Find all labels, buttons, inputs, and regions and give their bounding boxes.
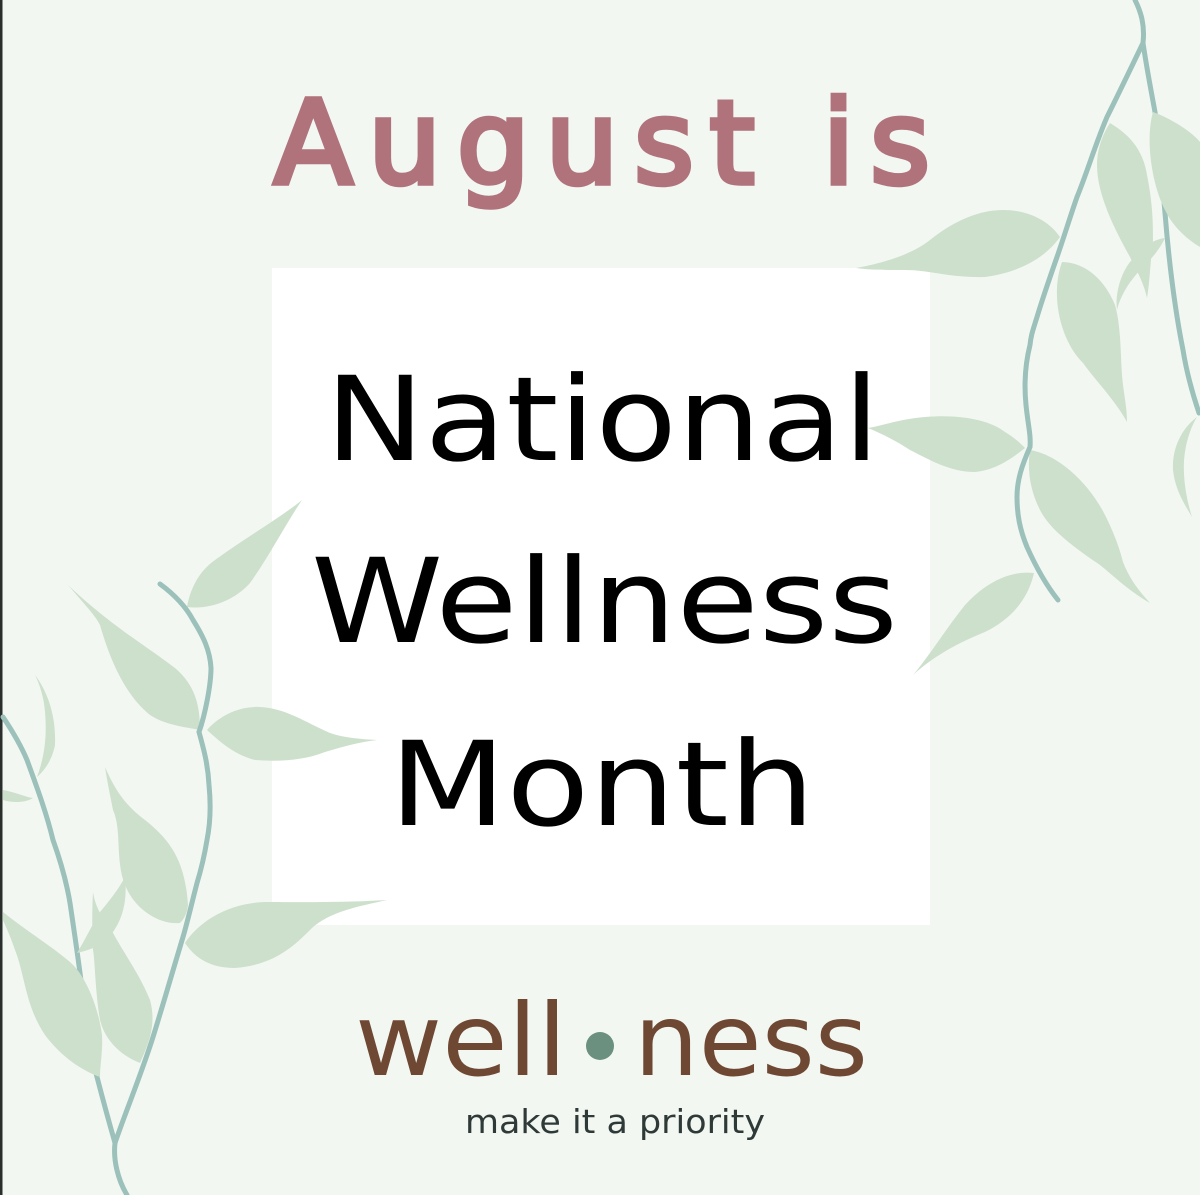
top-right leaves: [856, 112, 1200, 422]
logo word: ness: ness: [634, 982, 868, 1099]
left main vine: [115, 584, 211, 1195]
right main vine: [1017, 0, 1144, 600]
logo word: well: well: [355, 982, 567, 1099]
tagline: make it a priority: [465, 1102, 765, 1141]
logo dot: [586, 1032, 614, 1060]
main title: [311, 351, 898, 853]
left upper leaves: [3, 500, 377, 802]
logo: [355, 982, 868, 1141]
title line: National: National: [325, 351, 880, 488]
heading: August is: August is: [274, 77, 930, 211]
title line: Wellness: Wellness: [311, 533, 898, 670]
title line: Month: Month: [389, 716, 815, 853]
left lower leaves: [3, 767, 387, 1077]
white center panel: [272, 268, 930, 925]
mid-right leaves: [868, 416, 1197, 675]
